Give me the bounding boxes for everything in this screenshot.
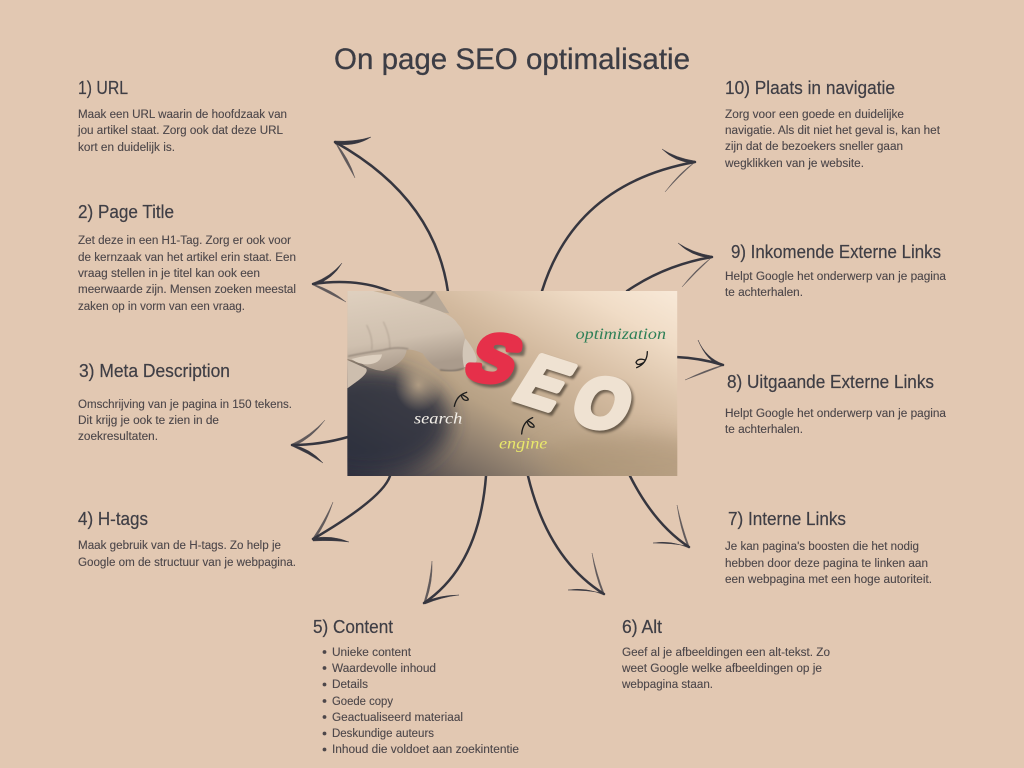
heading: 10) Plaats in navigatie	[725, 78, 895, 98]
letter O: O	[562, 360, 643, 446]
label: optimization: optimization	[576, 326, 666, 343]
label: search: search	[414, 410, 462, 427]
panel: 3 Meta Description	[78, 361, 292, 443]
body text	[621, 645, 830, 691]
body text: Helpt Google het onderwerp van je pagina	[725, 269, 946, 283]
body text: zaken op in vorm van een vraag.	[78, 299, 245, 313]
panel: 9 Inkomende Externe Links	[725, 242, 946, 299]
body text: Zet deze in een H1-Tag. Zorg er ook voor	[78, 233, 291, 247]
arrow: to Interne Links	[630, 476, 689, 548]
letter E	[511, 353, 582, 418]
arrow: to Alt	[528, 476, 604, 595]
arrow: to Inkomende Externe Links	[627, 243, 712, 291]
body text: Je kan pagina's boosten die het nodig	[725, 539, 919, 553]
body text: navigatie. Als dit niet het geval is, kan het	[725, 123, 941, 137]
panel: 4 H-tags	[78, 509, 296, 569]
hand holding the letter	[347, 291, 477, 388]
swirl: search	[454, 392, 468, 406]
heading: 9) Inkomende Externe Links	[731, 242, 941, 262]
letter S	[465, 332, 527, 389]
heading: 7) Interne Links	[728, 509, 846, 529]
infographic canvas	[78, 47, 946, 753]
body text	[725, 406, 946, 436]
body text: een webpagina met een hoge autoriteit.	[725, 572, 932, 586]
letter S: S	[455, 319, 534, 398]
body text: Maak een URL waarin de hoofdzaak van	[78, 107, 287, 121]
bullet list: Deskundige auteurs	[332, 726, 434, 740]
arrow: to Content	[424, 476, 486, 604]
letter E: E	[504, 344, 589, 427]
bullet list: Inhoud die voldoet aan zoekintentie	[332, 742, 519, 756]
bullet list	[323, 645, 519, 756]
body text: Omschrijving van je pagina in 150 tekens.	[78, 397, 292, 411]
heading: 4) H-tags	[78, 509, 148, 529]
body text: Zorg voor een goede en duidelijke	[725, 107, 904, 121]
letter O	[574, 376, 636, 434]
panel: 10 Plaats in navigatie	[724, 78, 941, 170]
body text: weet Google welke afbeeldingen op je	[621, 661, 822, 675]
body text	[724, 107, 941, 170]
arrow: to Meta Description	[292, 420, 348, 463]
body text: Geef al je afbeeldingen een alt-tekst. Zo	[622, 645, 830, 659]
panel: 5 Content	[313, 617, 519, 756]
body text	[78, 538, 296, 569]
heading: 1) URL	[78, 78, 128, 98]
arrow: to URL	[335, 137, 448, 292]
swirl: engine	[522, 418, 534, 434]
body text: Dit krijg je ook te zien in de	[78, 413, 219, 427]
body text: Maak gebruik van de H-tags. Zo help je	[78, 538, 281, 552]
body text	[78, 397, 292, 443]
body text: zoekresultaten.	[78, 429, 158, 443]
swirl: optimization	[636, 352, 647, 368]
body text	[77, 107, 287, 154]
bullet list: Geactualiseerd materiaal	[332, 710, 463, 724]
arrow: to Uitgaande Externe Links	[676, 340, 723, 380]
body text	[725, 539, 932, 586]
letter O: O	[564, 363, 645, 449]
body text: vraag stellen in je titel kan ook een	[78, 266, 260, 280]
body text: jou artikel staat. Zorg ook dat deze URL	[77, 123, 283, 137]
body text	[725, 269, 946, 299]
label: engine: engine	[499, 435, 547, 452]
arrow: to H-tags	[313, 476, 390, 542]
bullet list: Goede copy	[332, 694, 394, 708]
body text: de kernzaak van het artikel erin staat. Een	[78, 250, 296, 264]
body text: Helpt Google het onderwerp van je pagina	[725, 406, 946, 420]
body text	[78, 233, 296, 313]
panel: 1 URL	[77, 78, 287, 154]
heading: 6) Alt	[622, 617, 662, 637]
body text: webpagina staan.	[621, 677, 713, 691]
letter S: S	[457, 322, 537, 401]
heading: 5) Content	[313, 617, 393, 637]
body text: meerwaarde zijn. Mensen zoeken meestal	[78, 282, 296, 296]
letter E: E	[502, 341, 587, 424]
body text: hebben door deze pagina te linken aan	[725, 556, 928, 570]
body text: te achterhalen.	[725, 422, 803, 436]
arrow: to Plaats in navigatie	[542, 149, 695, 291]
bullet list: Waardevolle inhoud	[332, 661, 436, 675]
bullet list: Details	[332, 677, 368, 691]
panel: 7 Interne Links	[725, 509, 932, 586]
panel: 2 Page Title	[78, 202, 296, 313]
heading: 2) Page Title	[78, 202, 174, 222]
panel: 8 Uitgaande Externe Links	[725, 372, 946, 436]
body text: kort en duidelijk is.	[78, 140, 175, 154]
title: On page SEO optimalisatie	[334, 43, 690, 76]
central SEO photo	[347, 291, 678, 476]
heading: 3) Meta Description	[79, 361, 230, 381]
body text: Google om de structuur van je webpagina.	[78, 555, 296, 569]
body text: te achterhalen.	[725, 285, 803, 299]
heading: 8) Uitgaande Externe Links	[727, 372, 934, 392]
panel: 6 Alt	[621, 617, 830, 691]
arrow: to Page Title	[313, 263, 398, 302]
body text: zijn dat de bezoekers sneller gaan	[725, 139, 903, 153]
body text: wegklikken van je website.	[724, 156, 864, 170]
bullet list: Unieke content	[332, 645, 412, 659]
